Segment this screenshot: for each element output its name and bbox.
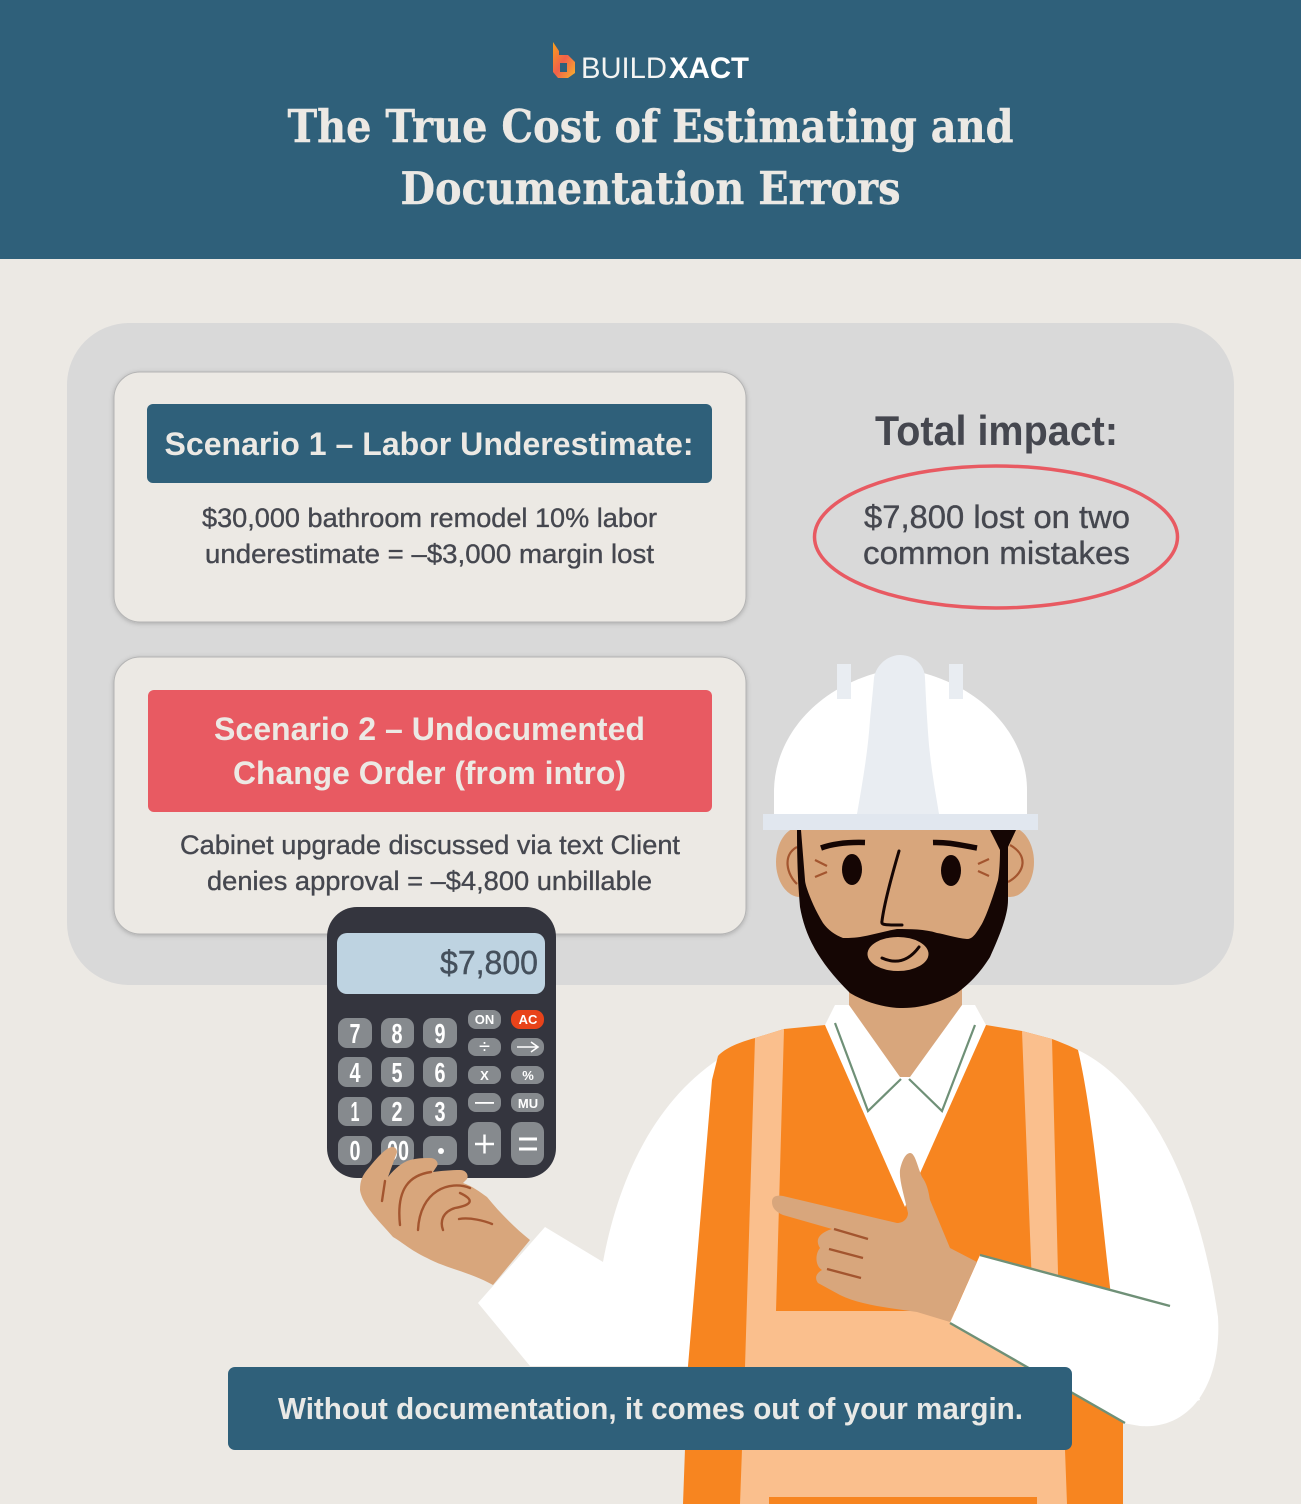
text: scenario 2 detail: denies approval = –$4,800 unbillable — [207, 866, 652, 896]
eyes, brows and nose — [815, 842, 989, 925]
heading: scenario 2 — [148, 690, 712, 812]
calculator keys: 0 — [350, 1135, 360, 1166]
calculator display — [337, 933, 545, 994]
title — [288, 100, 1014, 215]
header band — [0, 0, 1301, 259]
callout: total impact: $7,800 lost on two — [864, 499, 1130, 535]
right sleeve — [950, 1255, 1200, 1423]
callout: total impact — [814, 466, 1178, 608]
calculator keys: 2 — [392, 1096, 402, 1127]
title: The True Cost of Estimating and — [288, 100, 1014, 153]
heading: scenario 1: Scenario 1 – Labor Underestimate: — [164, 426, 694, 462]
panel: scenario 1 — [114, 372, 746, 622]
logo: Buildxact: XACT — [669, 52, 749, 85]
text: scenario 2 detail: Cabinet upgrade discussed via text Client — [180, 830, 680, 860]
face — [797, 830, 1008, 960]
logo: Buildxact: BUILD — [581, 52, 667, 85]
banner: closing message: Without documentation, it comes out of your margin. — [278, 1391, 1023, 1426]
title: Documentation Errors — [400, 162, 900, 215]
calculator keys: ON — [475, 1012, 494, 1027]
text: scenario 2 detail — [180, 830, 680, 896]
beard — [797, 830, 1016, 1008]
calculator keys: 4 — [350, 1057, 361, 1088]
shirt front and collar — [825, 985, 986, 1207]
calculator keys: 5 — [392, 1057, 402, 1088]
calculator keys: 8 — [392, 1018, 402, 1049]
calculator keys — [338, 1010, 544, 1166]
calculator keys: % — [522, 1068, 534, 1083]
calculator keys: 00 — [387, 1135, 409, 1166]
logo: Buildxact — [553, 42, 749, 85]
text: scenario 1 detail — [202, 503, 657, 569]
heading: scenario 1 — [147, 404, 712, 483]
calculator keys: AC — [519, 1012, 538, 1027]
calculator keys: ÷ — [479, 1036, 490, 1058]
text: scenario 1 detail: underestimate = –$3,000 margin lost — [205, 539, 655, 569]
banner: closing message — [228, 1367, 1072, 1450]
panel: scenario 2 — [114, 657, 746, 934]
calculator keys: X — [480, 1068, 489, 1083]
callout: total impact: common mistakes — [863, 535, 1130, 571]
calculator keys: 3 — [434, 1096, 446, 1127]
illustration: calculator — [327, 907, 556, 1178]
total impact heading: Total impact: — [875, 407, 1118, 454]
heading: scenario 2: Change Order (from intro) — [233, 755, 626, 791]
heading: scenario 2: Scenario 2 – Undocumented — [214, 711, 645, 747]
mouth — [868, 937, 928, 971]
shirt body and arms — [478, 1050, 1218, 1500]
calculator keys: 9 — [434, 1018, 446, 1049]
calculator keys: MU — [518, 1096, 538, 1111]
pointing hand — [772, 1153, 977, 1322]
calculator keys: 7 — [350, 1018, 360, 1049]
calculator keys: 1 — [350, 1096, 360, 1127]
left hand holding calculator — [360, 1147, 530, 1285]
panel: scenarios background — [67, 323, 1234, 985]
hard hat — [763, 655, 1038, 830]
illustration: construction worker — [360, 655, 1218, 1504]
ears — [776, 827, 1034, 897]
hi-vis vest — [683, 1025, 1123, 1504]
calculator display: $7,800 — [440, 944, 538, 981]
text: scenario 1 detail: $30,000 bathroom remodel 10% labor — [202, 503, 657, 533]
head — [763, 655, 1038, 1008]
calculator keys: 6 — [434, 1057, 446, 1088]
